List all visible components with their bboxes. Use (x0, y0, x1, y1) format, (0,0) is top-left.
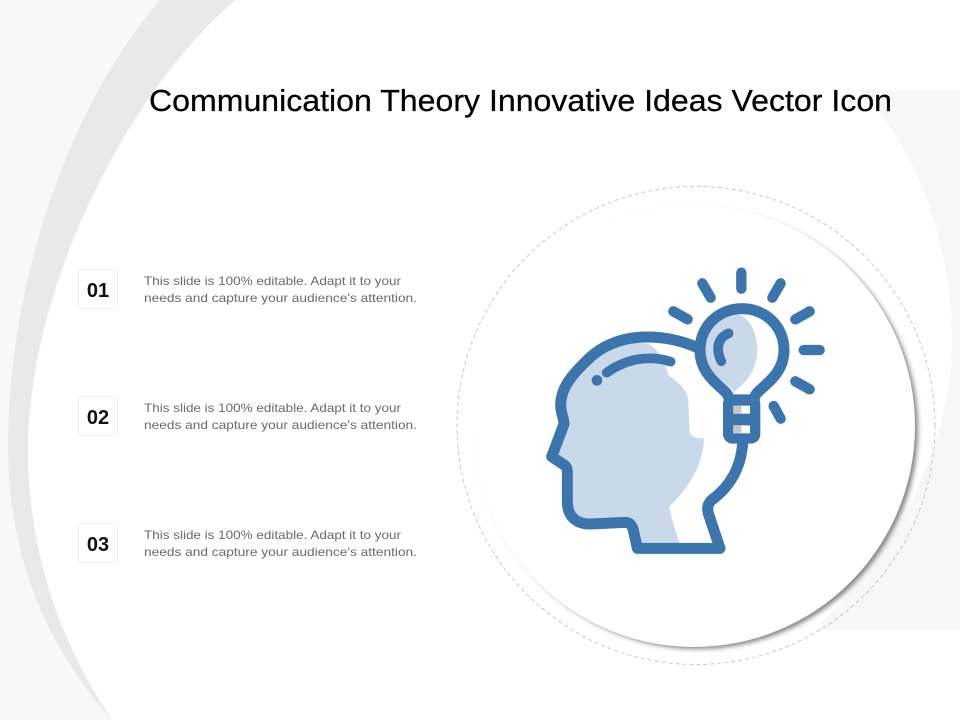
text block 01: needs and capture your audience's attention. (144, 291, 417, 305)
text block 01 (144, 274, 417, 305)
bulb fill (702, 314, 757, 392)
text block 02 (144, 401, 417, 432)
number box 01: 01 (87, 280, 109, 302)
forehead highlights (607, 333, 729, 373)
text block 01: This slide is 100% editable. Adapt it to your (144, 274, 401, 288)
number box 03: 03 (87, 534, 109, 556)
item 03 (78, 524, 417, 562)
background: right white ellipse (700, 90, 952, 630)
dashed outer ring (457, 186, 935, 664)
bulb base (728, 399, 755, 439)
text block 03 (144, 528, 417, 559)
number box 02 (78, 396, 118, 436)
item 01 (78, 270, 417, 308)
number box 01 (78, 270, 118, 308)
background: left curved band (8, 0, 235, 720)
background: left gray area (0, 0, 160, 720)
forehead dot (592, 375, 602, 386)
bulb outline (700, 309, 784, 397)
text block 03: This slide is 100% editable. Adapt it to your (144, 528, 401, 542)
circle shadow (478, 209, 918, 649)
head fill (552, 343, 704, 543)
base window top (733, 406, 750, 414)
icon: head with light bulb (552, 273, 820, 548)
light rays (673, 273, 820, 419)
text block 03: needs and capture your audience's attention. (144, 545, 417, 559)
background: right gray panel (780, 90, 960, 630)
number box 02: 02 (87, 407, 109, 429)
item 02 (78, 396, 417, 436)
head outline (552, 337, 743, 548)
number box 03 (78, 524, 118, 562)
base window bottom (733, 425, 750, 433)
white disc (473, 205, 915, 647)
text block 02: This slide is 100% editable. Adapt it to your (144, 401, 401, 415)
title: Communication Theory Innovative Ideas Vector Icon (149, 83, 892, 118)
text block 02: needs and capture your audience's attention. (144, 418, 417, 432)
